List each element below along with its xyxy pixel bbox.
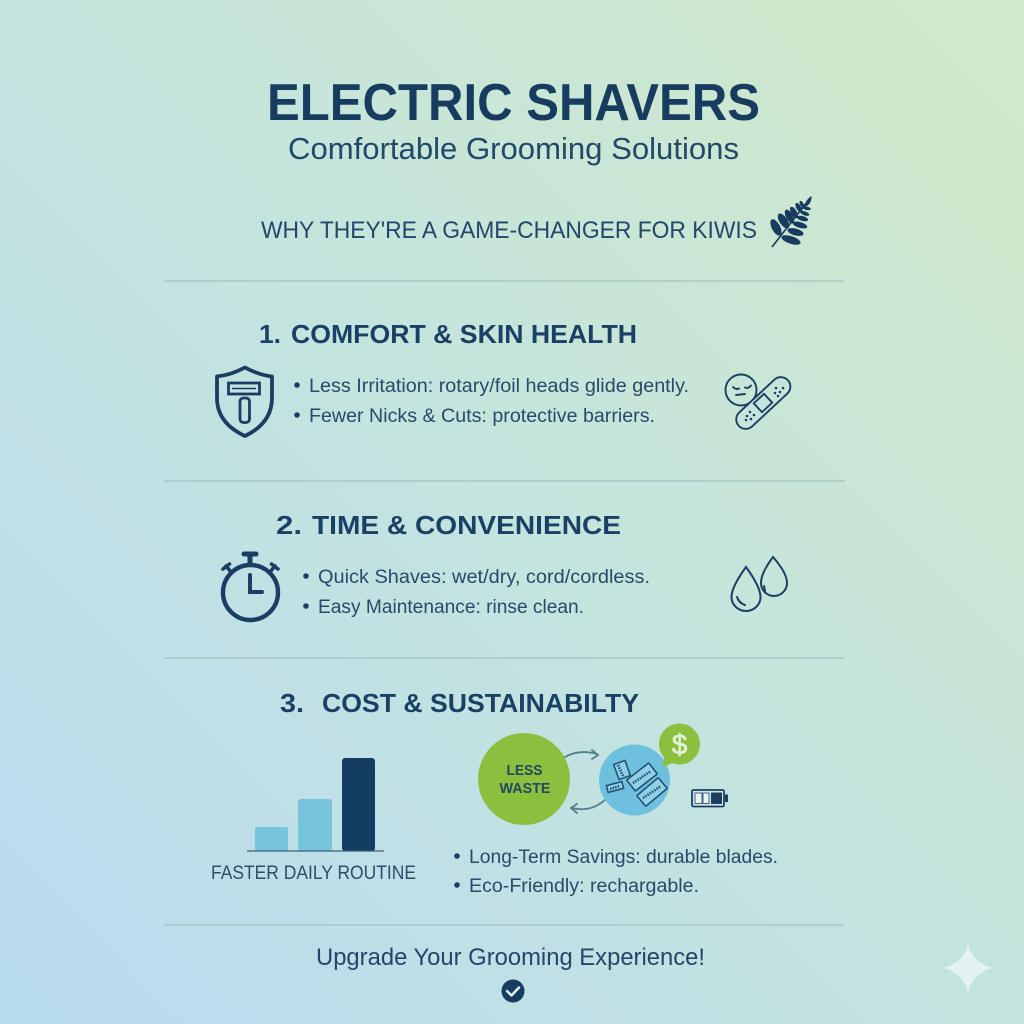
icon: shield with razor: [217, 368, 272, 436]
icon: dollar bubble: [659, 724, 700, 767]
bullet list: [454, 847, 778, 897]
bullet list: Less Irritation: rotary/foil heads glide gently.: [309, 376, 689, 397]
bar chart: [211, 758, 416, 884]
icon: less waste circle: [478, 733, 570, 825]
bullet list: [303, 567, 650, 618]
heading: COMFORT & SKIN HEALTH: [291, 319, 637, 349]
bullet list: Eco-Friendly: rechargable.: [469, 876, 699, 897]
icon: dollar bubble: $: [672, 729, 688, 760]
icon: water drops: [732, 557, 787, 611]
panel: cost and sustainability: [211, 688, 778, 897]
icon: stopwatch: [223, 554, 278, 620]
bullet list: Easy Maintenance: rinse clean.: [318, 597, 584, 618]
header: [261, 73, 812, 247]
heading: TIME & CONVENIENCE: [312, 510, 621, 540]
heading: 1.: [259, 319, 281, 349]
subtitle: Comfortable Grooming Solutions: [288, 131, 739, 166]
tagline: WHY THEY'RE A GAME-CHANGER FOR KIWIS: [261, 217, 757, 244]
icon: face and bandage: [726, 373, 794, 433]
call to action: Upgrade Your Grooming Experience!: [316, 944, 705, 971]
chart label: FASTER DAILY ROUTINE: [211, 863, 416, 884]
bullet list: Quick Shaves: wet/dry, cord/cordless.: [318, 567, 650, 588]
heading: 3.: [280, 688, 304, 718]
icon: blades circle: [599, 744, 670, 816]
bullet list: Long-Term Savings: durable blades.: [469, 847, 778, 868]
icon: check badge: [502, 980, 524, 1002]
bullet list: Fewer Nicks & Cuts: protective barriers.: [309, 406, 655, 427]
panel: time and convenience: [223, 510, 787, 620]
footer: [316, 944, 705, 1002]
bullet list: [294, 376, 689, 427]
icon: sparkle watermark: [943, 944, 993, 993]
arrows: recycle loop: [565, 750, 607, 813]
icon: less waste circle: WASTE: [500, 781, 551, 797]
icon: less waste circle: LESS: [506, 763, 543, 779]
panel: comfort and skin health: [217, 319, 794, 436]
heading: COST & SUSTAINABILTY: [322, 688, 639, 718]
dividers: [164, 281, 845, 925]
title: ELECTRIC SHAVERS: [267, 73, 760, 131]
icon: battery: [692, 790, 728, 806]
heading: 2.: [276, 510, 302, 540]
icon: fern leaf: [768, 196, 812, 247]
